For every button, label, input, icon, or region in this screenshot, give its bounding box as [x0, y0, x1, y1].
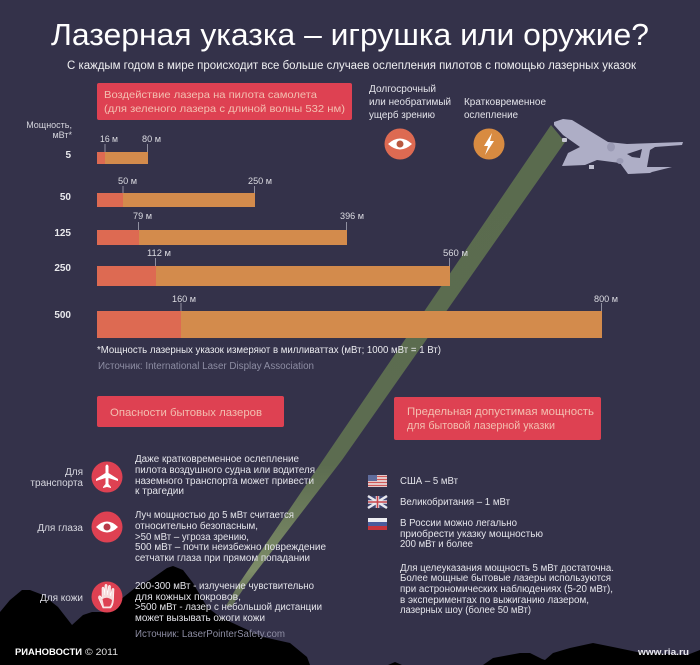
flag: UK	[368, 496, 387, 508]
panel: chart heading: (для зеленого лазера с длиной волны 532 нм)	[104, 103, 345, 115]
flag: USA	[368, 475, 387, 487]
url: www.ria.ru	[637, 647, 689, 658]
danger: transport: наземного транспорта может привести	[135, 476, 314, 487]
flag: Russia	[368, 518, 387, 530]
logo: RIA Novosti	[15, 647, 118, 658]
source: laser association: Источник: International Laser Display Association	[98, 361, 314, 372]
text: Russia: приобрести указку мощностью	[400, 528, 543, 540]
panel: dangers heading: Опасности бытовых лазеров	[110, 407, 262, 419]
panel: permitted power heading	[394, 397, 601, 440]
legend: long-term damage: или необратимый	[369, 96, 451, 108]
row: 5 mW: 16 м	[100, 134, 118, 145]
footnote: *Мощность лазерных указок измеряют в милливаттах (мВт; 1000 мВт = 1 Вт)	[97, 345, 441, 356]
danger: skin: может вызывать ожоги кожи	[135, 613, 265, 624]
mountains silhouette	[0, 566, 700, 665]
row: 500 mW: 160 м	[172, 294, 196, 305]
danger: skin: для кожных покровов,	[135, 592, 241, 603]
text: usage note: Более мощные бытовые лазеры используются	[400, 572, 611, 584]
text: Russia	[400, 518, 543, 550]
text: usage note: при астрономических наблюдениях (5-20 мВт),	[400, 583, 613, 595]
danger: transport: транспорта	[30, 478, 83, 489]
row: 500 mW: 800 м	[594, 294, 618, 305]
danger: transport: к трагедии	[135, 486, 184, 497]
danger: eyes: Для глаза	[37, 523, 83, 534]
panel: chart heading: Воздействие лазера на пилота самолета	[104, 89, 317, 101]
danger: skin: >500 мВт - лазер с небольшой дистанции	[135, 601, 322, 613]
row: 250 mW: 250	[54, 263, 71, 274]
panel: dangers heading	[97, 396, 284, 427]
row: 50 mW: 50	[60, 192, 71, 203]
text: usage note: в экспериментах по выжиганию лазером,	[400, 595, 589, 606]
row: 125 mW: 396 м	[340, 211, 364, 222]
axis label: power	[26, 120, 72, 140]
row: 250 mW: 112 м	[147, 248, 171, 259]
panel: permitted power heading: для бытовой лазерной указки	[407, 420, 555, 432]
text: usage note	[400, 563, 614, 616]
row: 125 mW: 79 м	[133, 211, 152, 222]
danger: transport: пилота воздушного судна или водителя	[135, 465, 315, 476]
icon: eye	[92, 512, 122, 542]
legend: short-term blinding: Кратковременное	[464, 97, 546, 108]
legend: long-term damage: ущерб зрению	[369, 109, 435, 121]
danger: skin: 200-300 мВт - излучение чувствительно	[135, 581, 314, 592]
legend: short-term blinding: ослепление	[464, 110, 518, 121]
danger: eyes: 500 мВт – почти неизбежно повреждение	[135, 541, 326, 553]
danger: transport	[30, 454, 315, 497]
logo: RIA Novosti: РИАНОВОСТИ	[15, 647, 82, 658]
row: 5 mW: 80 м	[142, 134, 161, 145]
bar chart	[54, 134, 618, 338]
row: 500 mW	[54, 294, 618, 338]
icon: eye orange	[384, 128, 416, 160]
text: usage note: лазерных шоу (более 50 мВт)	[400, 604, 531, 616]
logo: RIA Novosti: © 2011	[85, 647, 118, 658]
row: 500 mW: 500	[54, 310, 71, 321]
row: 50 mW: 50 м	[118, 176, 137, 187]
danger: eyes: Луч мощностью до 5 мВт считается	[135, 510, 294, 521]
axis label: power: мВт*	[52, 130, 72, 140]
icon: hand	[92, 582, 122, 612]
danger: eyes	[37, 510, 326, 564]
icon: plane	[92, 462, 122, 492]
text: Russia: 200 мВт и более	[400, 538, 473, 550]
danger: eyes: >50 мВт – угроза зрению,	[135, 532, 249, 543]
text: UK: Великобритания – 1 мВт	[400, 496, 510, 508]
text: usage note: Для целеуказания мощность 5 мВт достаточна.	[400, 563, 614, 574]
row: 125 mW: 125	[54, 228, 71, 239]
row: 50 mW	[60, 176, 272, 207]
title: Лазерная указка – игрушка или оружие?	[51, 17, 649, 52]
danger: eyes: относительно безопасным,	[135, 520, 258, 532]
row: 5 mW	[65, 134, 161, 164]
panel: permitted power heading: Предельная допустимая мощность	[407, 406, 594, 418]
legend: long-term damage	[369, 84, 451, 160]
danger: eyes: сетчатки глаза при прямом попадании	[135, 553, 310, 564]
icon: airplane	[554, 119, 683, 174]
danger: skin	[40, 581, 322, 624]
danger: transport: Для	[65, 467, 83, 478]
source: laser pointer safety: Источник: LaserPointerSafety.com	[135, 629, 285, 640]
panel: chart heading	[97, 83, 352, 120]
icon: lightning	[474, 128, 504, 160]
row: 5 mW: 5	[65, 150, 71, 161]
row: 250 mW: 560 м	[443, 248, 468, 259]
legend: long-term damage: Долгосрочный	[369, 84, 436, 95]
row: 125 mW	[54, 211, 364, 245]
subtitle: С каждым годом в мире происходит все больше случаев ослепления пилотов с помощью лазерных указок	[67, 60, 637, 72]
text: USA: США – 5 мВт	[400, 476, 458, 487]
text: Russia: В России можно легально	[400, 518, 517, 529]
danger: skin: Для кожи	[40, 593, 83, 604]
axis label: power: Мощность,	[26, 120, 72, 130]
legend: short-term blinding	[464, 97, 546, 160]
danger: transport: Даже кратковременное ослепление	[135, 454, 299, 465]
row: 50 mW: 250 м	[248, 176, 272, 187]
laser beam	[226, 125, 565, 606]
row: 250 mW	[54, 248, 468, 286]
